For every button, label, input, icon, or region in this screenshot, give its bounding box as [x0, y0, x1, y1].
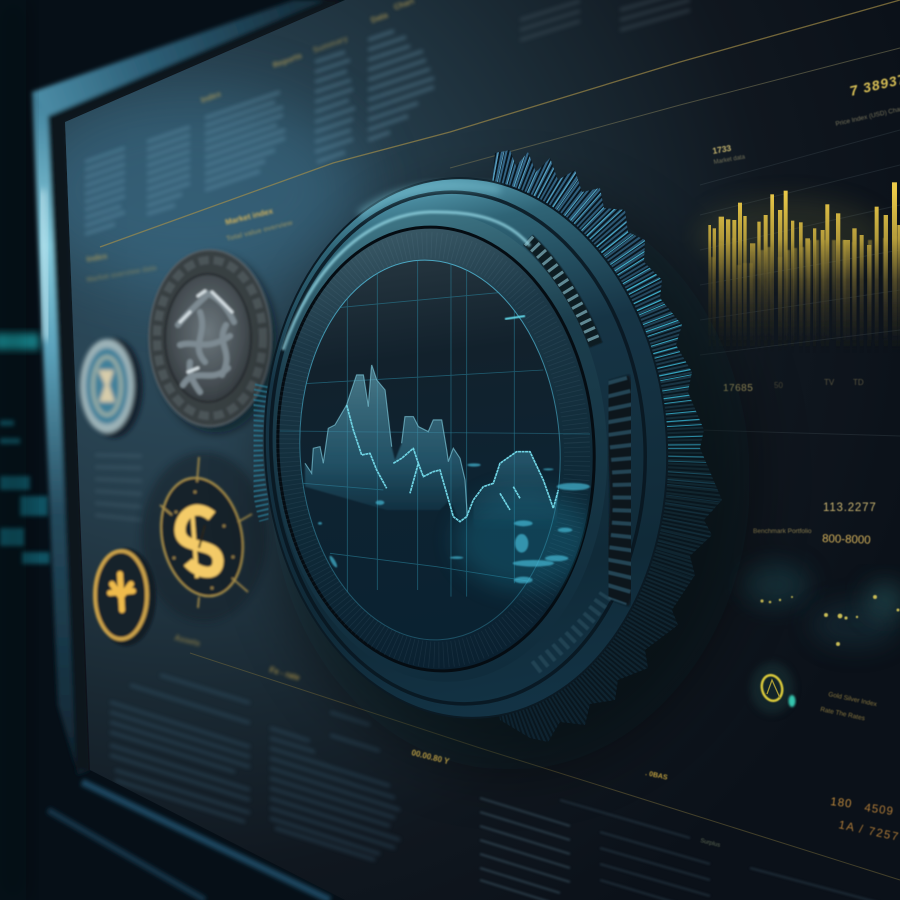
- blurred gold headings: [86, 0, 416, 284]
- main dial bezel: [251, 168, 681, 728]
- bar chart: back bars: [708, 182, 900, 336]
- chart axis labels: TD: [853, 378, 864, 387]
- lower gold labels: Assets: [174, 633, 202, 648]
- machined teeth: bottom right: [535, 595, 606, 668]
- coin: grey embossed medallion: [149, 250, 278, 434]
- radial fins: [492, 150, 722, 742]
- chart axis labels: [723, 378, 864, 392]
- dial screen: [267, 219, 605, 679]
- numbers and labels: top right: 1733: [712, 143, 732, 156]
- numbers and labels: middle right: 800-8000: [822, 533, 871, 547]
- machined teeth: top right: [528, 240, 596, 345]
- coin: gold dollar dial: [141, 452, 267, 622]
- left foreground dark vignette: [0, 0, 26, 900]
- bottom centre text blocks: [480, 798, 880, 900]
- left dial ticks: [256, 385, 266, 520]
- lower glow: [455, 490, 595, 590]
- numbers: bottom right: Surplus: [700, 838, 721, 849]
- lower gold labels: [174, 633, 451, 766]
- numbers and labels: middle right: Benchmark Portfolio: [753, 528, 812, 535]
- chart axis labels: TV: [824, 378, 835, 387]
- ring ticks: [278, 238, 588, 662]
- market index heading: Market index: [224, 206, 274, 227]
- main dial highlight dot: [505, 316, 525, 319]
- numbers and labels: middle right: Rate The Rates: [820, 706, 866, 723]
- numbers: bottom right: 1A / 7257: [837, 819, 900, 844]
- market index heading: [224, 208, 293, 241]
- inner display: [290, 253, 570, 647]
- left edge glowing data: [0, 333, 50, 564]
- chart axis labels: 50: [774, 381, 783, 390]
- lower gold labels: 00.00.80 Y: [411, 748, 451, 766]
- inner ridge: [273, 209, 604, 616]
- left text blocks: [98, 454, 139, 520]
- blurred gold headings: Index: [86, 251, 108, 264]
- horizontal scale line: [280, 431, 590, 434]
- data scatter: [318, 463, 590, 583]
- world map dots: [741, 563, 900, 649]
- numbers: bottom right: . 0BAS: [645, 770, 668, 782]
- numbers: bottom right: [645, 770, 900, 849]
- numbers and labels: middle right: 113.2277: [823, 502, 877, 514]
- numbers and labels: top right: Market data: [713, 154, 746, 166]
- coin: pale blurred: [80, 338, 143, 438]
- blurred gold headings: Data: [370, 10, 389, 25]
- grid lines: [303, 260, 544, 597]
- blurred gold headings: Reports: [272, 51, 304, 70]
- bottom text blocks: [110, 675, 400, 860]
- bar chart glow: [695, 197, 885, 273]
- blurred gold headings: Market overview data: [86, 265, 157, 284]
- icon: yellow ring with teal dot: [750, 662, 796, 714]
- monitor frame: [32, 0, 345, 900]
- machined teeth: right: [612, 380, 628, 600]
- coin: gold yen: [95, 548, 156, 646]
- market index heading: Total value overview: [226, 220, 294, 243]
- chart axis labels: 17685: [723, 383, 753, 394]
- upper left light wash: [20, 90, 360, 290]
- top left text columns: [85, 0, 690, 234]
- numbers: bottom right: 180: [830, 796, 853, 811]
- blurred gold headings: Index: [200, 89, 223, 105]
- numbers and labels: middle right: [753, 502, 878, 723]
- numbers and labels: middle right: Gold Silver Index: [828, 691, 878, 708]
- bezel dark groove: [258, 183, 658, 713]
- shadow beneath dial: [270, 190, 750, 770]
- numbers and labels: top right: [712, 70, 900, 166]
- bar chart: front bars: [711, 236, 898, 318]
- line chart: [305, 365, 558, 530]
- lower gold labels: Fx - rate: [268, 665, 301, 683]
- top highlight: [360, 186, 500, 215]
- numbers: bottom right: 4509: [864, 802, 895, 818]
- blurred gold headings: Summary: [312, 34, 349, 55]
